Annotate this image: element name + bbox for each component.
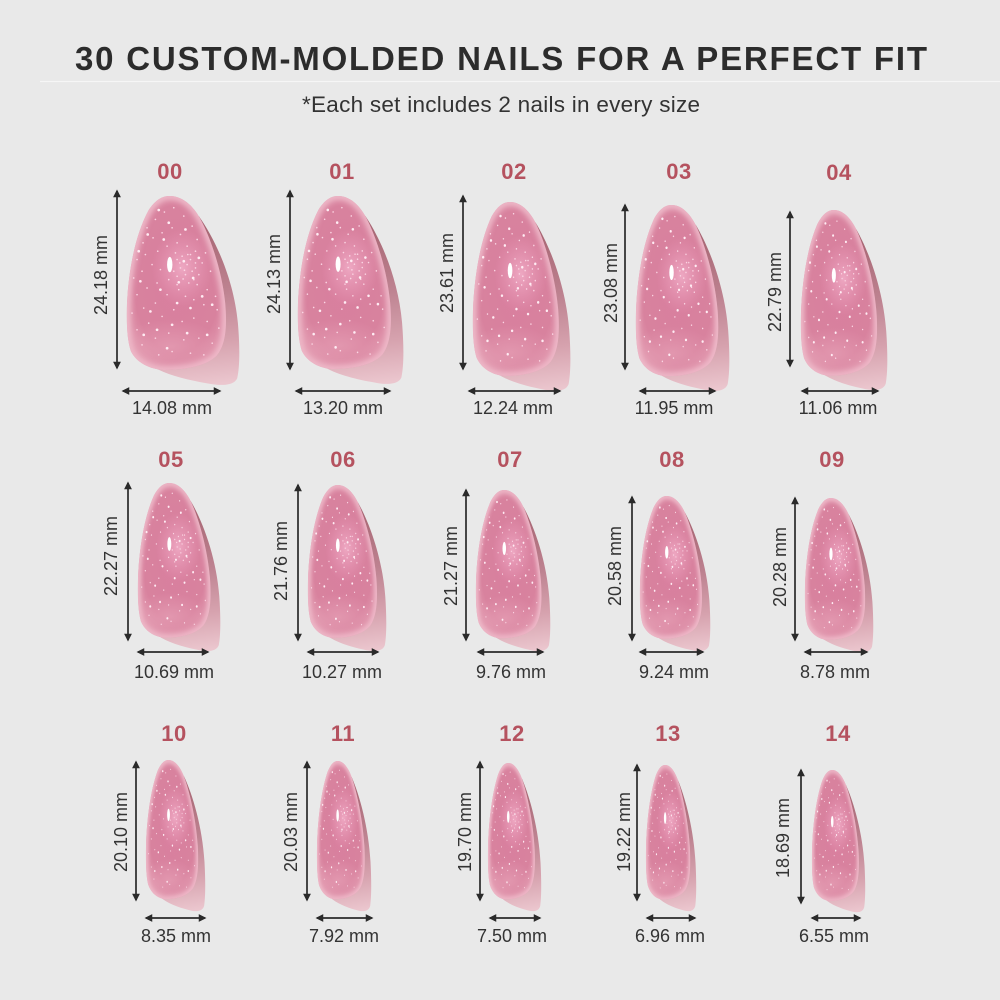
size 08: 9.24 mm: [639, 662, 709, 682]
size 04: [765, 160, 887, 418]
size 12: 19.70 mm: [455, 792, 475, 872]
size 13: [614, 721, 705, 946]
size 01: 24.13 mm: [264, 234, 284, 314]
size 05: 10.69 mm: [134, 662, 214, 682]
size 02: 02: [501, 159, 527, 184]
size 06: 10.27 mm: [302, 662, 382, 682]
size 03: 23.08 mm: [601, 243, 621, 323]
size 10: 8.35 mm: [141, 926, 211, 946]
size 06: [271, 447, 386, 682]
size 05: 05: [158, 447, 184, 472]
size 03: [601, 159, 729, 418]
size 07: 21.27 mm: [441, 526, 461, 606]
size 00: 24.18 mm: [91, 235, 111, 315]
size 14: 18.69 mm: [773, 798, 793, 878]
size 08: [605, 447, 710, 682]
size 11: 7.92 mm: [309, 926, 379, 946]
size 13: 6.96 mm: [635, 926, 705, 946]
size 03: 11.95 mm: [635, 398, 713, 418]
size 09: 8.78 mm: [800, 662, 870, 682]
size 01: [264, 159, 403, 418]
size 14: 14: [825, 721, 851, 746]
size 13: 19.22 mm: [614, 792, 634, 872]
size 09: 09: [819, 447, 845, 472]
size 00: 14.08 mm: [132, 398, 212, 418]
size 12: [455, 721, 547, 946]
title: 30 CUSTOM-MOLDED NAILS FOR A PERFECT FIT: [75, 40, 927, 77]
size 06: 06: [330, 447, 356, 472]
size 08: 08: [659, 447, 685, 472]
size 07: 07: [497, 447, 523, 472]
size 11: 20.03 mm: [281, 792, 301, 872]
subtitle: *Each set includes 2 nails in every size: [302, 92, 700, 117]
size 04: 04: [826, 160, 852, 185]
size 12: 12: [499, 721, 525, 746]
size 03: 03: [666, 159, 692, 184]
size 00: 00: [157, 159, 183, 184]
size 09: 20.28 mm: [770, 527, 790, 607]
size 07: 9.76 mm: [476, 662, 546, 682]
size 02: [437, 159, 570, 418]
size 01: 01: [329, 159, 355, 184]
size 05: 22.27 mm: [101, 516, 121, 596]
size 14: 6.55 mm: [799, 926, 869, 946]
size 08: 20.58 mm: [605, 526, 625, 606]
size 12: 7.50 mm: [477, 926, 547, 946]
size 10: [111, 721, 211, 946]
size 06: 21.76 mm: [271, 521, 291, 601]
size 10: 10: [161, 721, 187, 746]
size 13: 13: [655, 721, 681, 746]
size 11: 11: [331, 721, 355, 746]
size 05: [101, 447, 220, 682]
size 01: 13.20 mm: [303, 398, 383, 418]
size 02: 23.61 mm: [437, 233, 457, 313]
size 11: [281, 721, 379, 946]
size 14: [773, 721, 869, 946]
size 04: 11.06 mm: [799, 398, 877, 418]
size 09: [770, 447, 873, 682]
size 10: 20.10 mm: [111, 792, 131, 872]
size 04: 22.79 mm: [765, 252, 785, 332]
size 00: [91, 159, 239, 418]
size 02: 12.24 mm: [473, 398, 553, 418]
size 07: [441, 447, 550, 682]
